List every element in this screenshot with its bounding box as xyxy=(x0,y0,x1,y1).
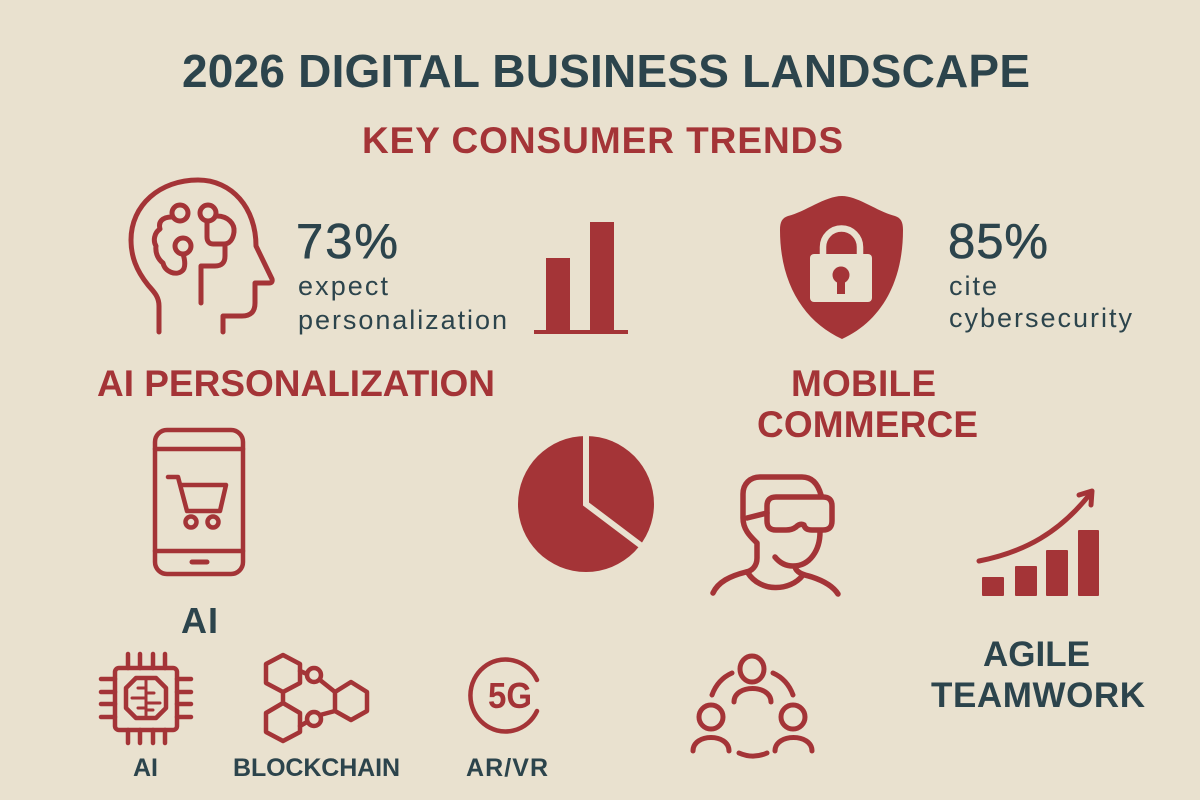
icon: blockchain xyxy=(266,655,367,741)
stat: 73 percent expect personalization xyxy=(296,215,507,335)
heading: AI personalization: AI PERSONALIZATION xyxy=(97,363,495,404)
heading: mobile commerce: MOBILE xyxy=(791,363,936,404)
stat: 85 percent cite cybersecurity: 85% xyxy=(948,215,1048,269)
icon: bar chart xyxy=(534,222,628,334)
heading: mobile commerce: COMMERCE xyxy=(757,404,978,445)
heading: agile teamwork: AGILE xyxy=(983,635,1090,674)
stat: 73 percent expect personalization: expect xyxy=(298,271,388,301)
stat: 85 percent cite cybersecurity: cybersecurity xyxy=(949,303,1132,333)
icon: 5G: 5G xyxy=(488,675,532,716)
icon: growth bars with arrow xyxy=(979,491,1099,596)
icon: phone with shopping cart xyxy=(155,430,243,574)
label: AI: AI xyxy=(181,600,218,641)
icon: VR headset user xyxy=(713,477,838,594)
stat: 85 percent cite cybersecurity: cite xyxy=(949,271,997,301)
icon: security shield xyxy=(780,196,903,339)
stat: 73 percent expect personalization: 73% xyxy=(296,215,398,269)
label: AR/VR: AR/VR xyxy=(466,754,548,782)
stat: 85 percent cite cybersecurity xyxy=(948,215,1132,333)
label: AI small: AI xyxy=(133,754,158,782)
stat: 73 percent expect personalization: personalization xyxy=(298,305,507,335)
label: blockchain: BLOCKCHAIN xyxy=(233,754,400,782)
icon: 5G xyxy=(470,659,537,732)
heading: mobile commerce xyxy=(757,363,978,445)
icon: AI head with brain xyxy=(131,180,272,332)
icon: AI chip xyxy=(101,654,191,743)
heading: agile teamwork: TEAMWORK xyxy=(931,676,1145,715)
subtitle: KEY CONSUMER TRENDS xyxy=(362,120,843,161)
icon: pie chart xyxy=(518,432,654,572)
icon: team circle xyxy=(693,656,812,756)
title: 2026 DIGITAL BUSINESS LANDSCAPE xyxy=(182,45,1030,97)
heading: agile teamwork xyxy=(931,635,1145,715)
